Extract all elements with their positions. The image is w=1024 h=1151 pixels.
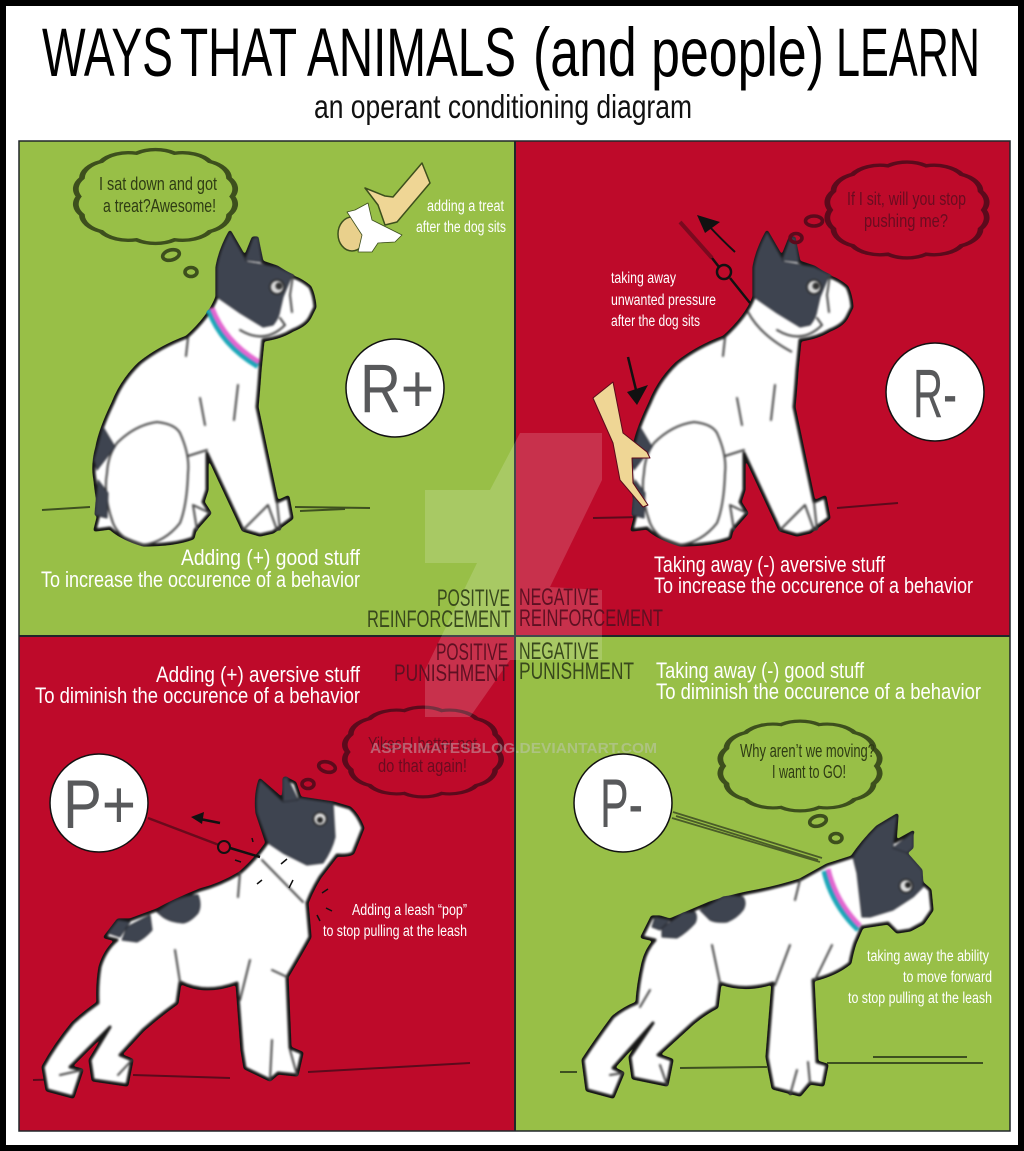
quadrant labels: PUNISHMENT	[519, 658, 634, 685]
dog sitting	[631, 232, 852, 545]
caption: after the dog sits	[611, 313, 700, 330]
quadrant labels	[367, 584, 663, 687]
bubble text: I sat down and got	[99, 174, 217, 194]
title: WAYS	[42, 14, 173, 91]
panel background	[515, 636, 1010, 1131]
ground line	[42, 507, 370, 511]
panel background	[19, 636, 515, 1131]
thought bubble	[720, 721, 880, 842]
title: ANIMALS	[307, 14, 516, 91]
panel: negative reinforcement	[515, 141, 1010, 636]
watermark logo	[425, 433, 602, 717]
ground line	[593, 503, 898, 518]
title	[42, 14, 980, 91]
collar	[748, 312, 792, 352]
bubble text	[99, 174, 217, 216]
badge P+: P+	[63, 766, 136, 843]
caption: to stop pulling at the leash	[848, 990, 992, 1007]
icon: taut leash	[672, 812, 822, 862]
watermark text: ASPRIMATESBLOG.DEVIANTART.COM	[370, 740, 657, 757]
bubble text: Yikes! I better not	[368, 734, 477, 754]
ground line	[560, 1057, 983, 1072]
dog sitting	[94, 232, 315, 545]
caption: taking away the ability	[867, 948, 989, 965]
title: (and people)	[533, 14, 824, 91]
caption: taking away	[611, 270, 676, 287]
caption	[416, 198, 506, 236]
bubble text	[740, 741, 875, 782]
bubble text: If I sit, will you stop	[847, 189, 966, 209]
caption	[848, 948, 992, 1007]
description	[35, 662, 361, 708]
badge P-	[574, 754, 672, 852]
collar	[209, 308, 259, 366]
bubble text: I want to GO!	[772, 762, 846, 782]
badge P+	[50, 754, 148, 852]
caption	[611, 270, 716, 330]
thought bubble	[790, 162, 987, 258]
quadrant labels: NEGATIVE	[519, 584, 599, 611]
bubble text: pushing me?	[864, 211, 948, 231]
description: Taking away (-) aversive stuff	[654, 552, 886, 577]
thought bubble	[76, 150, 235, 276]
caption: to stop pulling at the leash	[323, 923, 467, 940]
caption: Adding a leash “pop”	[352, 902, 467, 919]
subtitle: an operant conditioning diagram	[314, 88, 692, 125]
panel background	[515, 141, 1010, 636]
dog standing	[583, 815, 932, 1097]
panel: positive punishment	[19, 636, 515, 1131]
caption: adding a treat	[427, 198, 505, 215]
quadrant labels: POSITIVE	[437, 585, 510, 612]
icon: leash pop	[148, 812, 332, 921]
bubble text	[847, 189, 966, 231]
quadrant labels: REINFORCEMENT	[367, 606, 511, 633]
icon: leash with arrow	[680, 215, 750, 303]
description: To increase the occurence of a behavior	[41, 567, 360, 592]
description	[654, 552, 973, 598]
icon: hand giving treat	[338, 163, 430, 252]
icon: hand pressing with arrow	[593, 357, 650, 507]
dog standing	[43, 777, 363, 1097]
caption: unwanted pressure	[611, 292, 716, 309]
description: Adding (+) good stuff	[181, 545, 361, 570]
quadrant labels: NEGATIVE	[519, 638, 599, 665]
caption: after the dog sits	[416, 219, 506, 236]
quadrant labels: PUNISHMENT	[394, 660, 509, 687]
bubble text	[368, 734, 477, 776]
caption	[323, 902, 467, 940]
collar	[824, 869, 860, 930]
badge R+	[346, 339, 444, 437]
description	[656, 658, 981, 704]
description: To diminish the occurence of a behavior	[35, 683, 360, 708]
panel background	[19, 141, 515, 636]
badge R+: R+	[360, 350, 434, 427]
panel: negative punishment	[515, 636, 1010, 1131]
badge P-: P-	[600, 765, 643, 842]
description: Adding (+) aversive stuff	[156, 662, 361, 687]
ground line	[33, 1063, 470, 1080]
badge R-	[886, 343, 984, 441]
quadrant labels: REINFORCEMENT	[519, 605, 663, 632]
bubble text: do that again!	[378, 756, 467, 776]
bubble text: Why aren’t we moving?	[740, 741, 875, 761]
quadrant labels: POSITIVE	[436, 639, 508, 666]
description: Taking away (-) good stuff	[656, 658, 865, 683]
description	[41, 545, 361, 592]
title: THAT	[180, 14, 297, 91]
thought bubble	[302, 707, 501, 797]
caption: to move forward	[903, 969, 992, 986]
panel: positive reinforcement	[19, 141, 515, 636]
bubble text: a treat?Awesome!	[103, 196, 216, 216]
badge R-: R-	[913, 355, 957, 432]
